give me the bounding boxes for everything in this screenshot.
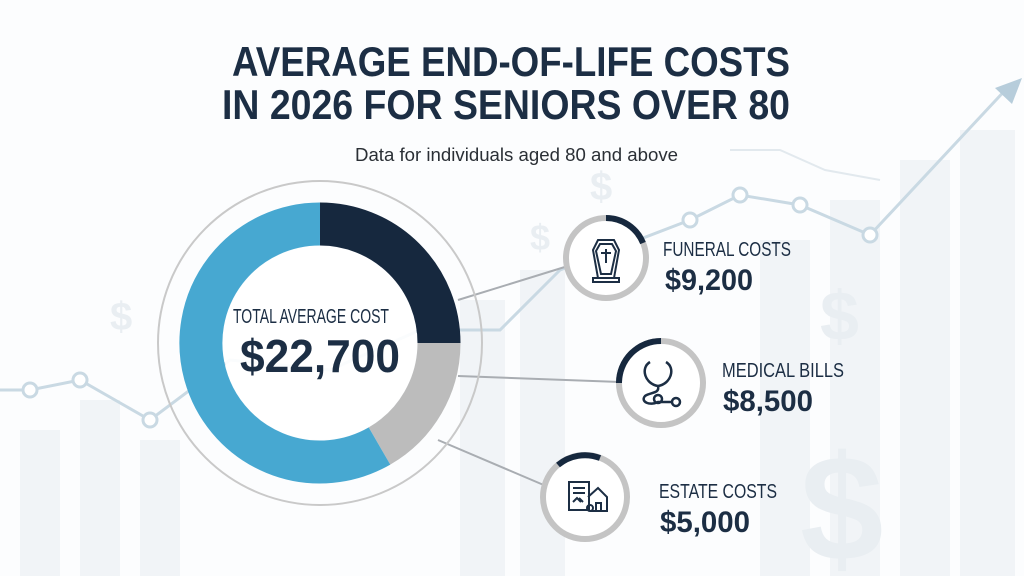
background chart: $ [110, 295, 132, 339]
icon: coffin [593, 240, 619, 282]
item: medical: MEDICAL BILLS [722, 360, 844, 382]
item: estate: ESTATE COSTS [659, 481, 777, 503]
total label: TOTAL AVERAGE COST [233, 306, 389, 328]
item: estate: $5,000 [660, 506, 750, 539]
subtitle: Data for individuals aged 80 and above [355, 145, 678, 165]
title: IN 2026 FOR SENIORS OVER 80 [222, 81, 790, 128]
background chart: $ [590, 165, 612, 209]
item: medical: $8,500 [723, 385, 813, 418]
item: funeral [566, 218, 791, 298]
connector lines [438, 266, 620, 486]
title [222, 38, 790, 128]
background chart: $ [530, 217, 550, 258]
total value: $22,700 [240, 330, 400, 382]
item: funeral: $9,200 [665, 264, 753, 297]
item: medical [619, 341, 844, 425]
icon: stethoscope [644, 362, 680, 406]
background chart: $ [820, 277, 859, 355]
donut chart [158, 181, 482, 505]
title: AVERAGE END-OF-LIFE COSTS [232, 38, 790, 85]
item: funeral: FUNERAL COSTS [663, 239, 791, 261]
item: estate [543, 455, 777, 539]
icon: document and house [569, 482, 607, 511]
